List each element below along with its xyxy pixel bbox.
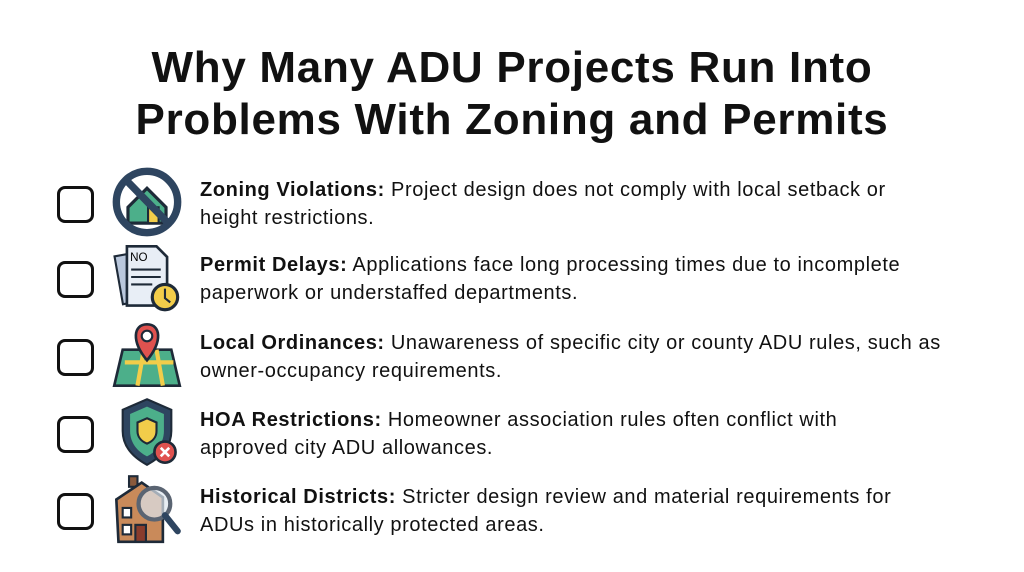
- icon: historic house magnifier: [115, 475, 181, 544]
- text: ADUs in historically protected areas.: [200, 514, 545, 536]
- icon: no house: [112, 168, 182, 236]
- text: [200, 486, 891, 536]
- checkbox: [57, 186, 94, 223]
- text: HOA Restrictions: Homeowner association rules often conflict with: [200, 409, 837, 431]
- text: [200, 332, 941, 382]
- icon: shield: [122, 398, 177, 466]
- checkbox: [57, 339, 94, 376]
- row: historical districts: [57, 475, 891, 544]
- checkbox: [57, 493, 94, 530]
- text: paperwork or understaffed departments.: [200, 282, 578, 304]
- checkbox: [57, 416, 94, 453]
- checkbox: [57, 261, 94, 298]
- text: Local Ordinances: Unawareness of specific city or county ADU rules, such as: [200, 332, 941, 354]
- row: zoning violations: [57, 168, 886, 236]
- title: [136, 43, 888, 144]
- text: owner-occupancy requirements.: [200, 360, 502, 382]
- row: permit delays: [57, 245, 900, 312]
- title: Why Many ADU Projects Run Into: [152, 43, 872, 92]
- text: [200, 254, 900, 304]
- text: Zoning Violations: Project design does not comply with local setback or: [200, 179, 886, 201]
- title: Problems With Zoning and Permits: [136, 95, 888, 144]
- text: Historical Districts: Stricter design review and material requirements for: [200, 486, 891, 508]
- text: [200, 179, 886, 229]
- text: approved city ADU allowances.: [200, 437, 493, 459]
- icon: documents clock: NO: [130, 251, 148, 264]
- icon: documents clock: [113, 245, 180, 312]
- row: local ordinances: [57, 323, 941, 387]
- text: [200, 409, 837, 459]
- text: height restrictions.: [200, 207, 374, 229]
- row: HOA restrictions: [57, 398, 837, 466]
- icon: map pin: [112, 323, 182, 387]
- text: Permit Delays: Applications face long processing times due to incomplete: [200, 254, 900, 276]
